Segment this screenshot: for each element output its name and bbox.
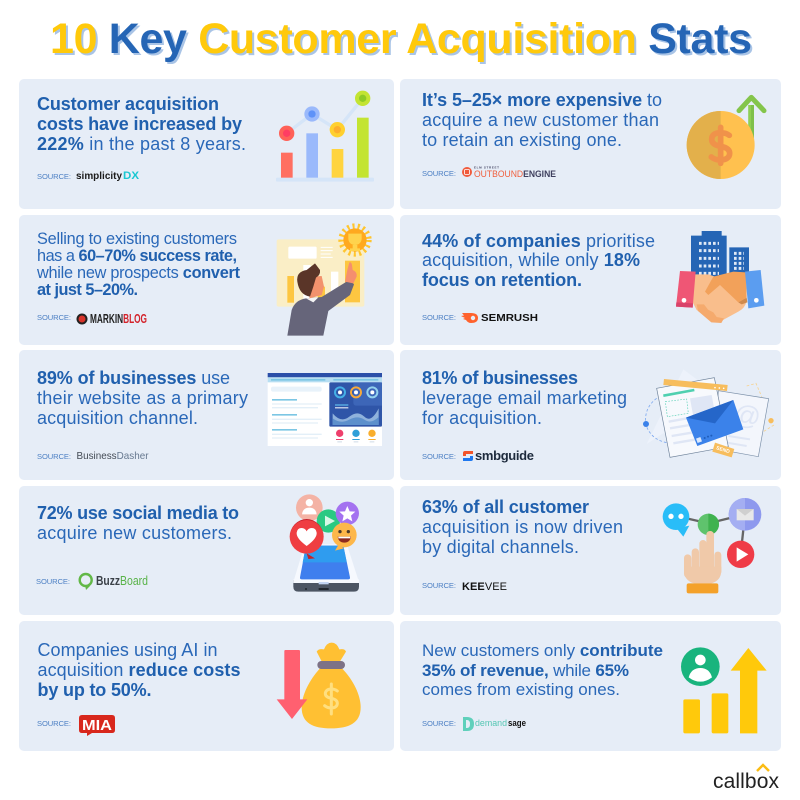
source: DemandSage: demand xyxy=(475,718,507,728)
icon: email envelope with documents: SEND xyxy=(715,445,731,455)
source: OutboundEngine: ELM STREET xyxy=(474,166,499,170)
source: BusinessDasher: SOURCE: xyxy=(37,452,71,461)
stat text: 63% of all customer xyxy=(422,497,589,517)
source: OutboundEngine: OUTBOUNDENGINE xyxy=(474,169,556,179)
stat text: their website as a primary xyxy=(37,388,248,408)
stat text: Customer acquisition xyxy=(37,94,219,114)
source: MIA: MIA xyxy=(82,717,112,734)
source: OutboundEngine xyxy=(422,166,556,179)
icon: handshake with buildings xyxy=(676,231,764,323)
stat text xyxy=(422,641,663,699)
source: BuzzBoard xyxy=(36,573,148,590)
source: BuzzBoard: Buzz xyxy=(96,573,120,588)
stat text: for acquisition. xyxy=(422,408,542,428)
stat text xyxy=(422,368,627,428)
panel: digital channels xyxy=(400,486,781,615)
source: simplicityDX: SOURCE: xyxy=(37,172,71,181)
source: MIA xyxy=(37,715,115,736)
icon: money bag with down arrow xyxy=(277,643,361,728)
panel: rising acquisition costs xyxy=(19,79,394,209)
source: simplicityDX: DX xyxy=(123,170,140,182)
icon: phone with social bubbles xyxy=(290,494,359,592)
source: BuzzBoard: Board xyxy=(120,573,148,588)
stat text: acquire new customers. xyxy=(37,523,232,543)
stat text: by up to 50%. xyxy=(38,680,152,700)
stat text: leverage email marketing xyxy=(422,388,627,408)
stat text xyxy=(37,368,248,428)
icon: email envelope with documents xyxy=(643,369,774,457)
panel: social media xyxy=(19,486,394,615)
source: simplicityDX xyxy=(37,170,140,182)
source: BuzzBoard: SOURCE: xyxy=(36,577,70,586)
stat text xyxy=(38,640,240,700)
stat text: It’s 5–25× more expensive to xyxy=(422,90,662,110)
stat text xyxy=(422,90,662,150)
panel: acquisition more expensive xyxy=(400,79,781,209)
source: smbguide: smbguide xyxy=(475,448,534,463)
logo: callbox: callbox xyxy=(713,770,780,793)
source: smbguide xyxy=(422,448,534,463)
stat text xyxy=(36,230,241,299)
stat text: to retain an existing one. xyxy=(422,130,622,150)
panel: acquisition vs retention priorities xyxy=(400,215,781,345)
panel: revenue contribution xyxy=(400,621,781,751)
stat text: 72% use social media to xyxy=(37,503,239,523)
stat text: acquisition, while only 18% xyxy=(422,250,640,270)
stat text: has a 60–70% success rate, xyxy=(37,247,237,265)
stat text: 89% of businesses use xyxy=(37,368,230,388)
icon: hand touching network xyxy=(663,498,761,593)
source: DemandSage xyxy=(422,717,526,731)
stat text: Selling to existing customers xyxy=(37,230,237,248)
stat text: while new prospects convert xyxy=(36,264,241,282)
stat text xyxy=(37,94,246,154)
panel: AI reduces costs xyxy=(19,621,394,751)
stat text: 35% of revenue, while 65% xyxy=(422,661,629,680)
stat text: New customers only contribute xyxy=(422,641,663,660)
stat text: focus on retention. xyxy=(422,270,582,290)
source: MarkinBlog: MARKINBLOG xyxy=(90,312,147,326)
icon: man pointing at dashboard with trophy xyxy=(277,227,368,336)
source: Keevee xyxy=(422,581,507,593)
panel: selling to existing customers xyxy=(19,215,394,345)
stat text: comes from existing ones. xyxy=(422,680,620,699)
icon: bar chart with trend line xyxy=(276,91,374,182)
icon: email envelope with documents: @ xyxy=(732,399,763,432)
stat text: by digital channels. xyxy=(422,537,579,557)
stat text: acquire a new customer than xyxy=(422,110,659,130)
stat text: 81% of businesses xyxy=(422,368,578,388)
stat text: at just 5–20%. xyxy=(37,281,138,299)
icon: coin with up arrow xyxy=(687,97,764,179)
stat text: acquisition channel. xyxy=(37,408,198,428)
source: MarkinBlog xyxy=(37,312,147,326)
source: MarkinBlog: SOURCE: xyxy=(37,313,71,322)
stat text: Companies using AI in xyxy=(38,640,218,660)
stat text: 44% of companies prioritise xyxy=(422,231,655,251)
source: smbguide: SOURCE: xyxy=(422,452,456,461)
title: 10 Key Customer Acquisition Stats xyxy=(50,15,752,63)
source: Keevee: SOURCE: xyxy=(422,581,456,590)
source: Semrush xyxy=(422,313,538,324)
stat text: costs have increased by xyxy=(37,114,242,134)
icon: customer with growth bars xyxy=(681,647,767,733)
source: BusinessDasher: BusinessDasher xyxy=(76,450,149,462)
source: Semrush: SOURCE: xyxy=(422,313,456,322)
source: MIA: SOURCE: xyxy=(37,719,71,728)
panel: website as primary channel xyxy=(19,350,394,480)
source: DemandSage: SOURCE: xyxy=(422,719,456,728)
stat text: acquisition reduce costs xyxy=(38,660,240,680)
source: DemandSage: sage xyxy=(508,718,526,728)
source: simplicityDX: simplicity xyxy=(76,170,122,182)
source: Keevee: KEEVEE xyxy=(462,581,507,593)
stat text: acquisition is now driven xyxy=(422,517,623,537)
stat text xyxy=(37,503,239,543)
source: BusinessDasher xyxy=(37,450,149,462)
icon: website dashboard xyxy=(268,373,382,446)
panel: email marketing xyxy=(400,350,781,480)
stat text xyxy=(422,231,655,290)
source: OutboundEngine: SOURCE: xyxy=(422,169,456,178)
source: Semrush: SEMRUSH xyxy=(481,313,538,324)
stat text: 222% in the past 8 years. xyxy=(37,134,246,154)
stat text xyxy=(422,497,623,557)
